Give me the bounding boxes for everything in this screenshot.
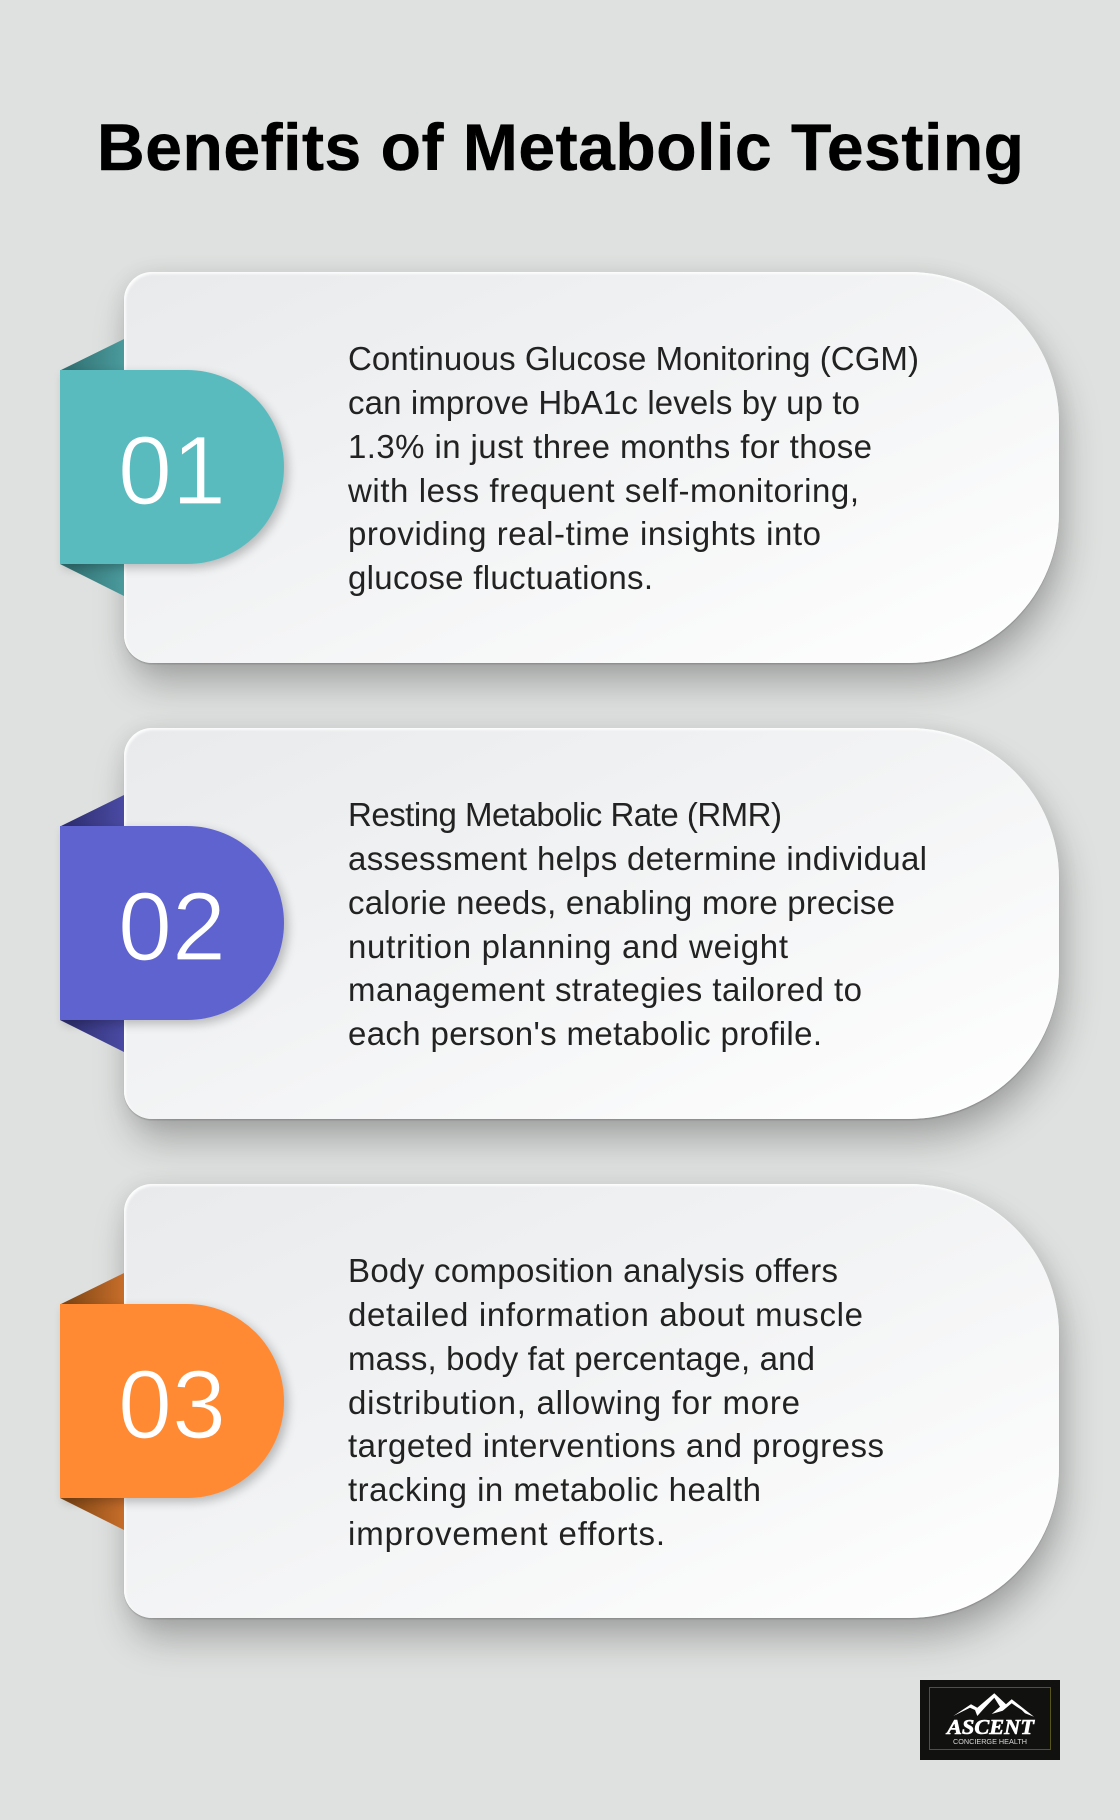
card 2 text: [348, 796, 927, 1052]
card 1 text: glucose fluctuations.: [348, 559, 653, 596]
card 3 text: tracking in metabolic health: [348, 1471, 761, 1508]
card 1 text: providing real-time insights into: [348, 515, 821, 552]
number 03: 03: [118, 1350, 226, 1459]
logo wordmark: ASCENT: [945, 1715, 1035, 1739]
card 2 text: assessment helps determine individual: [348, 840, 927, 877]
panel: card 3: [59, 1179, 1082, 1658]
logo wordmark: CONCIERGE HEALTH: [953, 1739, 1027, 1746]
card 3 text: detailed information about muscle: [348, 1296, 863, 1333]
card 2 background: [124, 728, 1059, 1119]
card 2 text: Resting Metabolic Rate (RMR): [348, 796, 782, 833]
panel: card 1: [59, 267, 1082, 702]
card 2 text: calorie needs, enabling more precise: [348, 884, 895, 921]
number 02: 02: [118, 872, 226, 981]
panel: card 2: [59, 723, 1082, 1158]
card 3 background: [124, 1184, 1059, 1618]
card 3 text: improvement efforts.: [348, 1515, 665, 1552]
card 1 text: can improve HbA1c levels by up to: [348, 384, 860, 421]
card 1 background: [124, 272, 1059, 663]
card 1 fold ribbons: [60, 339, 124, 596]
card 3 text: [348, 1252, 884, 1552]
card 2 fold ribbons: [60, 795, 124, 1052]
card 1 text: 1.3% in just three months for those: [348, 428, 872, 465]
card 2 text: nutrition planning and weight: [348, 928, 788, 965]
card 3 text: targeted interventions and progress: [348, 1427, 884, 1464]
icon: mountains: [953, 1693, 1034, 1717]
card 3 fold ribbons: [60, 1273, 124, 1530]
card 1 text: with less frequent self-monitoring,: [347, 472, 859, 509]
card 2 text: each person's metabolic profile.: [348, 1015, 822, 1052]
card 3 text: distribution, allowing for more: [348, 1384, 800, 1421]
number 01: 01: [118, 416, 226, 525]
card 2 text: management strategies tailored to: [348, 971, 862, 1008]
badge 02: [60, 826, 284, 1020]
logo wordmark: [945, 1715, 1035, 1746]
badge 01: [60, 370, 284, 564]
title: Benefits of Metabolic Testing: [97, 110, 1024, 184]
card 3 text: Body composition analysis offers: [348, 1252, 838, 1289]
logo: Ascent Concierge Health: [920, 1680, 1060, 1760]
badge 03: [60, 1304, 284, 1498]
card 1 text: Continuous Glucose Monitoring (CGM): [348, 340, 919, 377]
card 3 text: mass, body fat percentage, and: [348, 1340, 815, 1377]
card 1 text: [347, 340, 919, 596]
